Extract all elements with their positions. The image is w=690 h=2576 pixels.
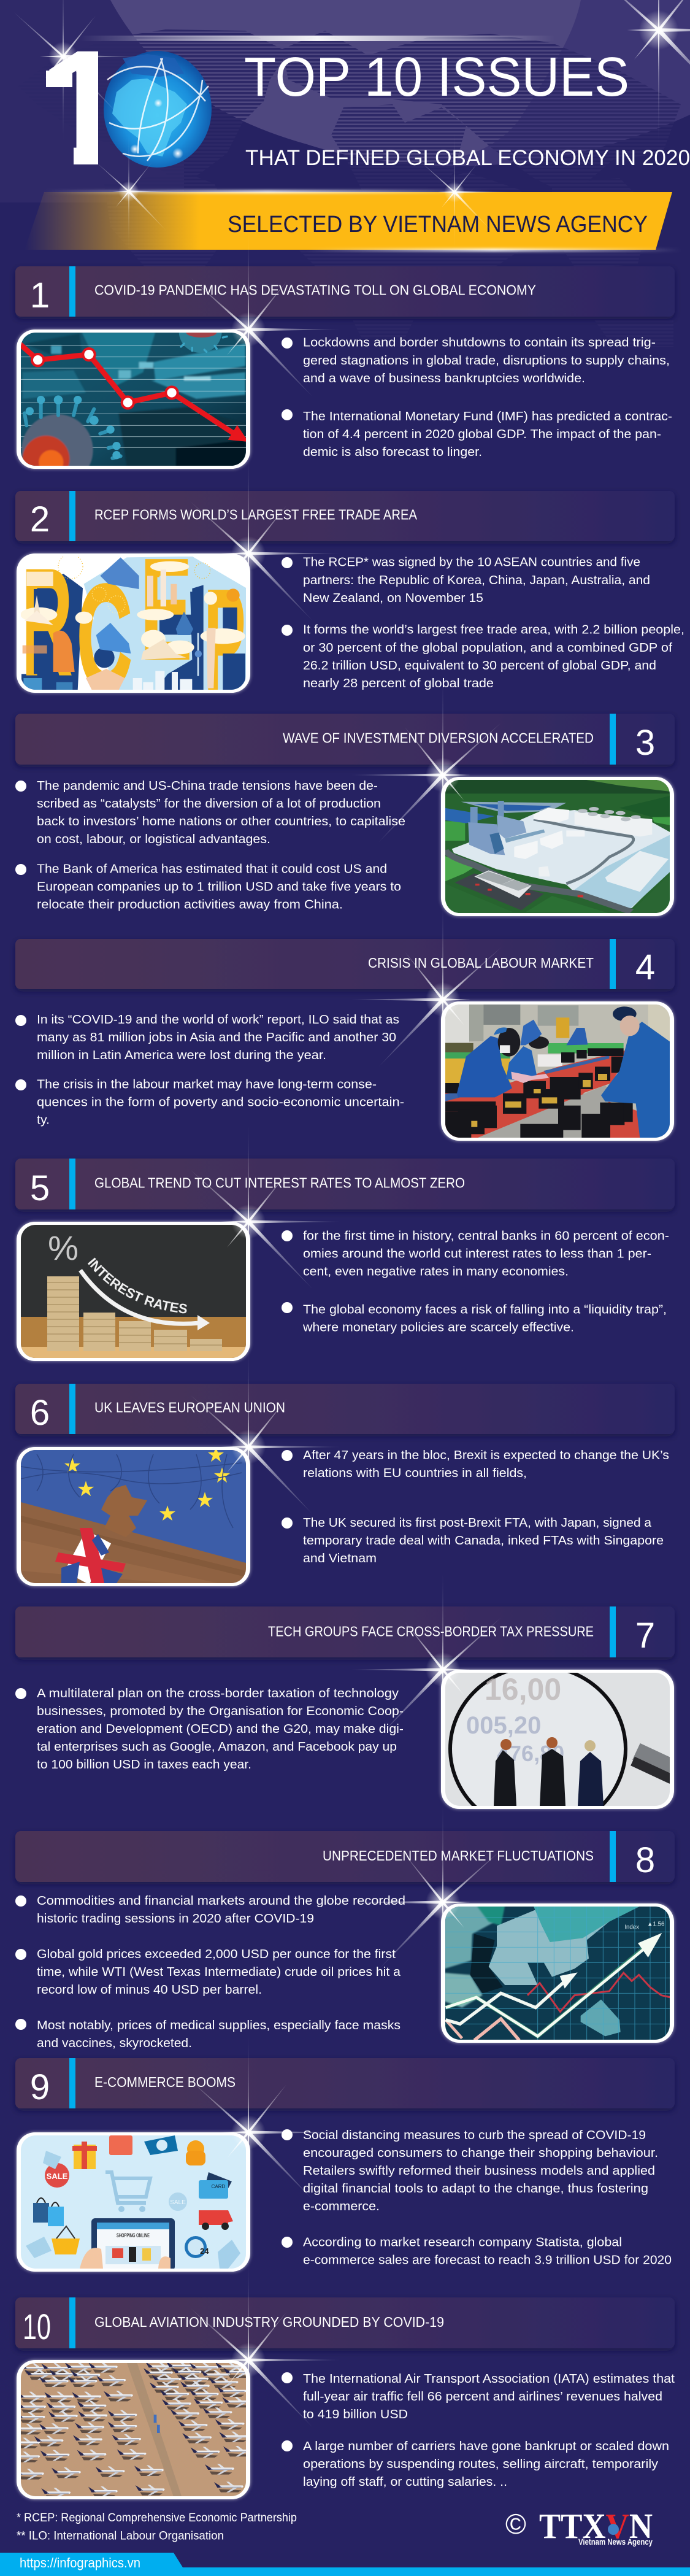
bullet text: Bank of America: European companies up to 1 trillion USD and take five years to bbox=[37, 880, 401, 893]
sparkle bbox=[13, 0, 141, 142]
bullet text: catalysts: The pandemic and US-China trade tensions have been de- bbox=[37, 779, 378, 793]
bullet text: gold and oil: time, while WTI (West Texas Intermediate) crude oil prices hit a bbox=[37, 1965, 401, 1979]
image: e-commerce icons bbox=[17, 2132, 250, 2272]
bullet text: post-Brexit FTA: The UK secured its first post-Brexit FTA, with Japan, signed a bbox=[303, 1516, 652, 1530]
bullet text: central banks: for the first time in history, central banks in 60 percent of econ- bbox=[303, 1228, 669, 1243]
image: e-commerce icons: SALE bbox=[170, 2199, 186, 2206]
bullet text: IATA: full-year air traffic fell 66 percent and airlines’ revenues halved bbox=[303, 2389, 662, 2404]
image: RCEP illustration bbox=[14, 551, 253, 695]
sparkle bbox=[351, 1568, 501, 1771]
panel: issue 3 bbox=[15, 674, 675, 916]
subtitle: THAT DEFINED GLOBAL ECONOMY IN 2020 bbox=[245, 146, 690, 170]
image: Brexit puzzle: ★ bbox=[207, 1443, 225, 1467]
heading bar: UK LEAVES EUROPEAN UNION bbox=[94, 1399, 285, 1415]
bullet text: catalysts bbox=[15, 779, 405, 846]
bullet text: largest free trade area: It forms the world’s largest free trade area, with 2.2 billion people, bbox=[303, 622, 684, 637]
bullet text: Bank of America: relocate their production activities away from China. bbox=[37, 897, 343, 912]
image: magnifying glass: 476,80 bbox=[497, 1741, 564, 1766]
heading bar bbox=[15, 266, 675, 317]
panel: issue 8 bbox=[15, 1801, 675, 2050]
bullet text: lockdowns: gered stagnations in global trade, disruptions to supply chains, bbox=[303, 353, 670, 368]
bullet text: carriers: A large number of carriers have gone bankrupt or scaled down bbox=[303, 2439, 669, 2453]
heading bar: 7 bbox=[635, 1616, 655, 1656]
bullet text: Bank of America bbox=[15, 862, 401, 912]
image: grounded aircraft bbox=[10, 2360, 253, 2499]
bullet text: Statista forecast: According to market research company Statista, global bbox=[303, 2235, 622, 2250]
bullet text: Statista forecast bbox=[282, 2235, 672, 2267]
bullet text: ILO: In its “COVID-19 and the world of work” report, ILO said that as bbox=[37, 1012, 399, 1027]
bullet text: post-Brexit FTA bbox=[282, 1516, 664, 1565]
numeral one bbox=[46, 52, 98, 164]
bullet text: social distancing: digital financial tools to adapt to the change, thus fostering bbox=[303, 2181, 648, 2196]
heading bar: 3 bbox=[635, 723, 655, 763]
yellow banner bbox=[25, 190, 681, 252]
bullet text: IMF bbox=[282, 409, 672, 459]
bullet text: commodities: Commodities and financial markets around the globe recorded bbox=[37, 1894, 405, 1908]
heading bar: 8 bbox=[635, 1840, 655, 1880]
bullet text: catalysts: on cost, labour, or logistical advantages. bbox=[37, 832, 270, 846]
image: market chart over world map: Index bbox=[624, 1924, 639, 1930]
bullet text: RCEP signing bbox=[282, 555, 650, 605]
heading bar: COVID-19 PANDEMIC HAS DEVASTATING TOLL ON GLOBAL ECONOMY bbox=[94, 282, 536, 298]
footer band with URL bbox=[0, 2553, 690, 2576]
heading bar bbox=[15, 491, 675, 541]
sparkle bbox=[190, 1346, 340, 1548]
image: magnifying glass: 005,20 bbox=[466, 1712, 541, 1739]
bullet text: lockdowns: and a wave of business bankruptcies worldwide. bbox=[303, 371, 585, 385]
sparkle bbox=[351, 674, 501, 876]
image: e-commerce icons: CARD bbox=[212, 2184, 226, 2189]
heading bar: E-COMMERCE BOOMS bbox=[94, 2074, 236, 2090]
image: Brexit puzzle: ★ bbox=[158, 1502, 177, 1526]
panel: issue 5 bbox=[14, 1138, 676, 1363]
bullet text: IATA: to 419 billion USD bbox=[303, 2407, 408, 2421]
bullet text: social distancing: e-commerce. bbox=[303, 2199, 380, 2213]
bullet text: liquidity trap: The global economy faces a risk of falling into a “liquidity trap”, bbox=[303, 1302, 667, 1317]
heading bar: RCEP FORMS WORLD’S LARGEST FREE TRADE AREA bbox=[94, 507, 418, 523]
bullet text: RCEP signing: The RCEP* was signed by the 10 ASEAN countries and five bbox=[303, 555, 640, 569]
bullet text: multilateral plan: to 100 billion USD in taxes each year. bbox=[37, 1757, 251, 1772]
panel: issue 6 bbox=[15, 1346, 675, 1589]
decorative light streak bbox=[80, 36, 555, 41]
heading bar bbox=[15, 714, 675, 765]
heading bar bbox=[15, 1159, 675, 1209]
heading bar: 9 bbox=[30, 2067, 50, 2107]
sparkle bbox=[190, 452, 340, 655]
image: magnifying glass bbox=[439, 1667, 677, 1811]
sparkle bbox=[351, 898, 501, 1101]
bullet text: RCEP signing: partners: the Republic of Korea, China, Japan, Australia, and bbox=[303, 573, 650, 587]
image: RCEP illustration: E bbox=[140, 530, 192, 689]
bullet text: IMF: tion of 4.4 percent in 2020 global GDP. The impact of the pan- bbox=[303, 427, 661, 441]
bullet text: medical supplies: Most notably, prices of medical supplies, especially face masks bbox=[37, 2018, 401, 2032]
bullet text: long-term consequences: The crisis in the labour market may have long-term conse- bbox=[37, 1078, 377, 1091]
bullet text: social distancing: Social distancing measures to curb the spread of COVID-19 bbox=[303, 2128, 646, 2142]
panel: issue 4 bbox=[15, 898, 675, 1141]
sparkle bbox=[190, 1120, 340, 1323]
heading bar: GLOBAL AVIATION INDUSTRY GROUNDED BY COVID-19 bbox=[94, 2314, 444, 2330]
bullet text: ILO: many as 81 million jobs in Asia and the Pacific and another 30 bbox=[37, 1030, 396, 1044]
heading bar: WAVE OF INVESTMENT DIVERSION ACCELERATED bbox=[283, 730, 594, 746]
bullet text: carriers: operations by suspending routes, selling aircraft, temporarily bbox=[303, 2457, 659, 2471]
footnotes: * RCEP: Regional Comprehensive Economic Partnership bbox=[17, 2512, 297, 2524]
image: Brexit puzzle: ★ bbox=[213, 1463, 231, 1488]
copyright mark: © bbox=[505, 2508, 526, 2540]
panel: issue 1 bbox=[15, 228, 675, 486]
heading bar: UNPRECEDENTED MARKET FLUCTUATIONS bbox=[323, 1848, 594, 1864]
bullet text: catalysts: back to investors’ home nations or other countries, to capitalise bbox=[37, 814, 405, 828]
header background: lens shapes and world map bbox=[0, 0, 690, 347]
bullet text: Brexit: relations with EU countries in all fields, bbox=[303, 1466, 527, 1480]
heading bar bbox=[15, 2297, 675, 2348]
image: RCEP illustration: C bbox=[77, 553, 132, 720]
bullet text: post-Brexit FTA: and Vietnam bbox=[303, 1551, 377, 1565]
bullet text: Bank of America: The Bank of America has estimated that it could cost US and bbox=[37, 862, 387, 876]
bullet text: gold and oil: record low of minus 40 USD per barrel. bbox=[37, 1983, 262, 1997]
sparkle bbox=[190, 2031, 340, 2234]
bullet text: social distancing bbox=[282, 2128, 658, 2213]
heading bar bbox=[15, 1384, 675, 1434]
heading bar bbox=[15, 1831, 675, 1882]
bullet text: ILO: million in Latin America were lost during the year. bbox=[37, 1048, 326, 1062]
bullet text: ILO bbox=[15, 1012, 399, 1062]
bullet text: social distancing: encouraged consumers to change their shopping behaviour. bbox=[303, 2146, 658, 2160]
bullet text: central banks bbox=[282, 1228, 669, 1279]
image: e-commerce icons: SHOPPING ONLINE bbox=[117, 2232, 150, 2239]
bullet text: carriers bbox=[282, 2439, 669, 2489]
bullet text: lockdowns bbox=[282, 335, 670, 385]
bullet text: liquidity trap: where monetary policies are scarcely effective. bbox=[302, 1321, 574, 1334]
bullet text: IATA bbox=[282, 2372, 675, 2421]
heading bar bbox=[15, 1606, 675, 1657]
bullet text: largest free trade area: nearly 28 percent of global trade bbox=[303, 676, 494, 690]
image: interest rates coins: % bbox=[48, 1228, 79, 1267]
bullet text: central banks: cent, even negative rates in many economies. bbox=[303, 1264, 569, 1279]
panel: issue 2: P bbox=[204, 560, 245, 720]
bullet text: gold and oil bbox=[15, 1947, 401, 1997]
bullet text: medical supplies bbox=[15, 2018, 401, 2050]
heading bar: CRISIS IN GLOBAL LABOUR MARKET bbox=[368, 955, 594, 971]
image: Brexit puzzle: ★ bbox=[63, 1454, 82, 1478]
heading bar bbox=[15, 939, 675, 989]
bullet text: IMF: demic is also forecast to linger. bbox=[303, 445, 482, 459]
bullet text: commodities bbox=[15, 1894, 405, 1926]
sparkle bbox=[190, 2259, 340, 2461]
image: e-commerce icons: SALE bbox=[47, 2172, 68, 2181]
logo: TTXVN Vietnam News Agency: Vietnam News Agency bbox=[578, 2537, 653, 2547]
bullet text: IMF: The International Monetary Fund (IMF) has predicted a contrac- bbox=[303, 409, 672, 423]
bullet text: Statista forecast: e-commerce sales are forecast to reach 3.9 trillion USD for 2020 bbox=[303, 2253, 672, 2267]
panel: issue 9 bbox=[15, 2031, 675, 2272]
bullet text: catalysts: scribed as “catalysts” for the diversion of a lot of production bbox=[37, 796, 381, 811]
heading bar: GLOBAL TREND TO CUT INTEREST RATES TO ALMOST ZERO bbox=[94, 1174, 465, 1190]
big numeral 10 emblem bbox=[46, 51, 212, 168]
logo: TTXVN Vietnam News Agency: TTXVN bbox=[539, 2506, 653, 2546]
heading bar: 5 bbox=[30, 1168, 50, 1208]
heading bar: 4 bbox=[635, 947, 655, 987]
bullet text: commodities: historic trading sessions in 2020 after COVID-19 bbox=[37, 1911, 314, 1926]
bullet text: lockdowns: Lockdowns and border shutdowns to contain its spread trig- bbox=[303, 335, 656, 350]
heading bar: TECH GROUPS FACE CROSS-BORDER TAX PRESSURE bbox=[268, 1624, 594, 1640]
bullet text: largest free trade area: 26.2 trillion USD, equivalent to 30 percent of global GDP, and bbox=[303, 658, 656, 673]
bullet text: largest free trade area bbox=[282, 622, 684, 690]
bullet text: RCEP signing: New Zealand, on November 15 bbox=[303, 591, 483, 605]
heading bar bbox=[15, 2058, 675, 2108]
numeral one: 1 bbox=[38, 15, 129, 199]
banner text: SELECTED BY VIETNAM NEWS AGENCY bbox=[228, 212, 648, 237]
footer band with URL: https://infographics.vn bbox=[20, 2555, 140, 2570]
heading bar: 2 bbox=[30, 499, 50, 539]
bullet text: post-Brexit FTA: temporary trade deal with Canada, inked FTAs with Singapore bbox=[303, 1533, 664, 1548]
sparkle bbox=[94, 131, 184, 252]
bullet text: multilateral plan: A multilateral plan on the cross-border taxation of technology bbox=[37, 1686, 399, 1700]
image: interest rates coins bbox=[14, 1219, 253, 1363]
bullet text: central banks: omies around the world cut interest rates to less than 1 per- bbox=[303, 1247, 651, 1260]
bullet text: liquidity trap bbox=[282, 1302, 667, 1334]
bullet text: medical supplies: and vaccines, skyrocketed. bbox=[37, 2036, 192, 2050]
panel: issue 2 bbox=[15, 452, 684, 720]
bullet text: multilateral plan: eration and Development (OECD) and the G20, may make digi- bbox=[37, 1722, 404, 1736]
footnotes bbox=[17, 2512, 297, 2543]
bullet text: Brexit bbox=[282, 1448, 669, 1480]
title: TOP 10 ISSUES bbox=[244, 47, 629, 108]
image: Brexit puzzle: ★ bbox=[196, 1488, 214, 1513]
bullet text: social distancing: Retailers swiftly reformed their business models and applied bbox=[303, 2164, 655, 2178]
bullet text: multilateral plan: businesses, promoted by the Organisation for Economic Coop- bbox=[37, 1704, 404, 1718]
image: e-commerce icons: 24 bbox=[200, 2246, 209, 2256]
bullet text: IATA: The International Air Transport Association (IATA) estimates that bbox=[303, 2372, 675, 2386]
heading bar: 10 bbox=[23, 2307, 51, 2347]
sparkle bbox=[592, 0, 690, 147]
panel: issue 10 bbox=[10, 2259, 675, 2499]
bullet text: long-term consequences bbox=[15, 1078, 404, 1127]
image: Brexit puzzle bbox=[17, 1443, 250, 1589]
image: market chart over world map bbox=[441, 1903, 674, 2043]
image: market chart over world map: ▲1.56 bbox=[647, 1921, 664, 1927]
panel: issue 7 bbox=[15, 1568, 679, 1832]
image: falling chart with virus bbox=[14, 327, 253, 471]
globe bbox=[104, 51, 212, 168]
image: industrial plant bbox=[441, 777, 674, 916]
image: magnifying glass: 16,00 bbox=[485, 1672, 561, 1706]
image: factory workers bbox=[441, 1001, 674, 1141]
bullet text: Brexit: After 47 years in the bloc, Brexit is expected to change the UK’s bbox=[303, 1448, 669, 1462]
sparkle bbox=[190, 228, 340, 431]
heading bar: 6 bbox=[30, 1393, 50, 1433]
image: RCEP illustration: R bbox=[22, 538, 72, 707]
bullet text: multilateral plan: tal enterprises such as Google, Amazon, and Facebook pay up bbox=[37, 1740, 397, 1754]
bullet text: long-term consequences: quences in the form of poverty and socio-economic uncertain- bbox=[37, 1095, 404, 1109]
footnotes: ** ILO: International Labour Organisation bbox=[17, 2529, 224, 2543]
heading bar: 1 bbox=[30, 276, 50, 315]
sparkle bbox=[351, 1801, 501, 2003]
bullet text: gold and oil: Global gold prices exceeded 2,000 USD per ounce for the first bbox=[37, 1947, 396, 1961]
bullet text: multilateral plan bbox=[15, 1686, 404, 1772]
bullet text: largest free trade area: or 30 percent of the global population, and a combined GDP of bbox=[303, 641, 672, 655]
image: interest rates coins: INTEREST RATES bbox=[88, 1258, 187, 1313]
bullet text: long-term consequences: ty. bbox=[37, 1113, 50, 1127]
image: Brexit puzzle: ★ bbox=[77, 1477, 95, 1502]
sparkle bbox=[420, 131, 510, 253]
bullet text: carriers: laying off staff, or cutting salaries. .. bbox=[303, 2475, 507, 2489]
